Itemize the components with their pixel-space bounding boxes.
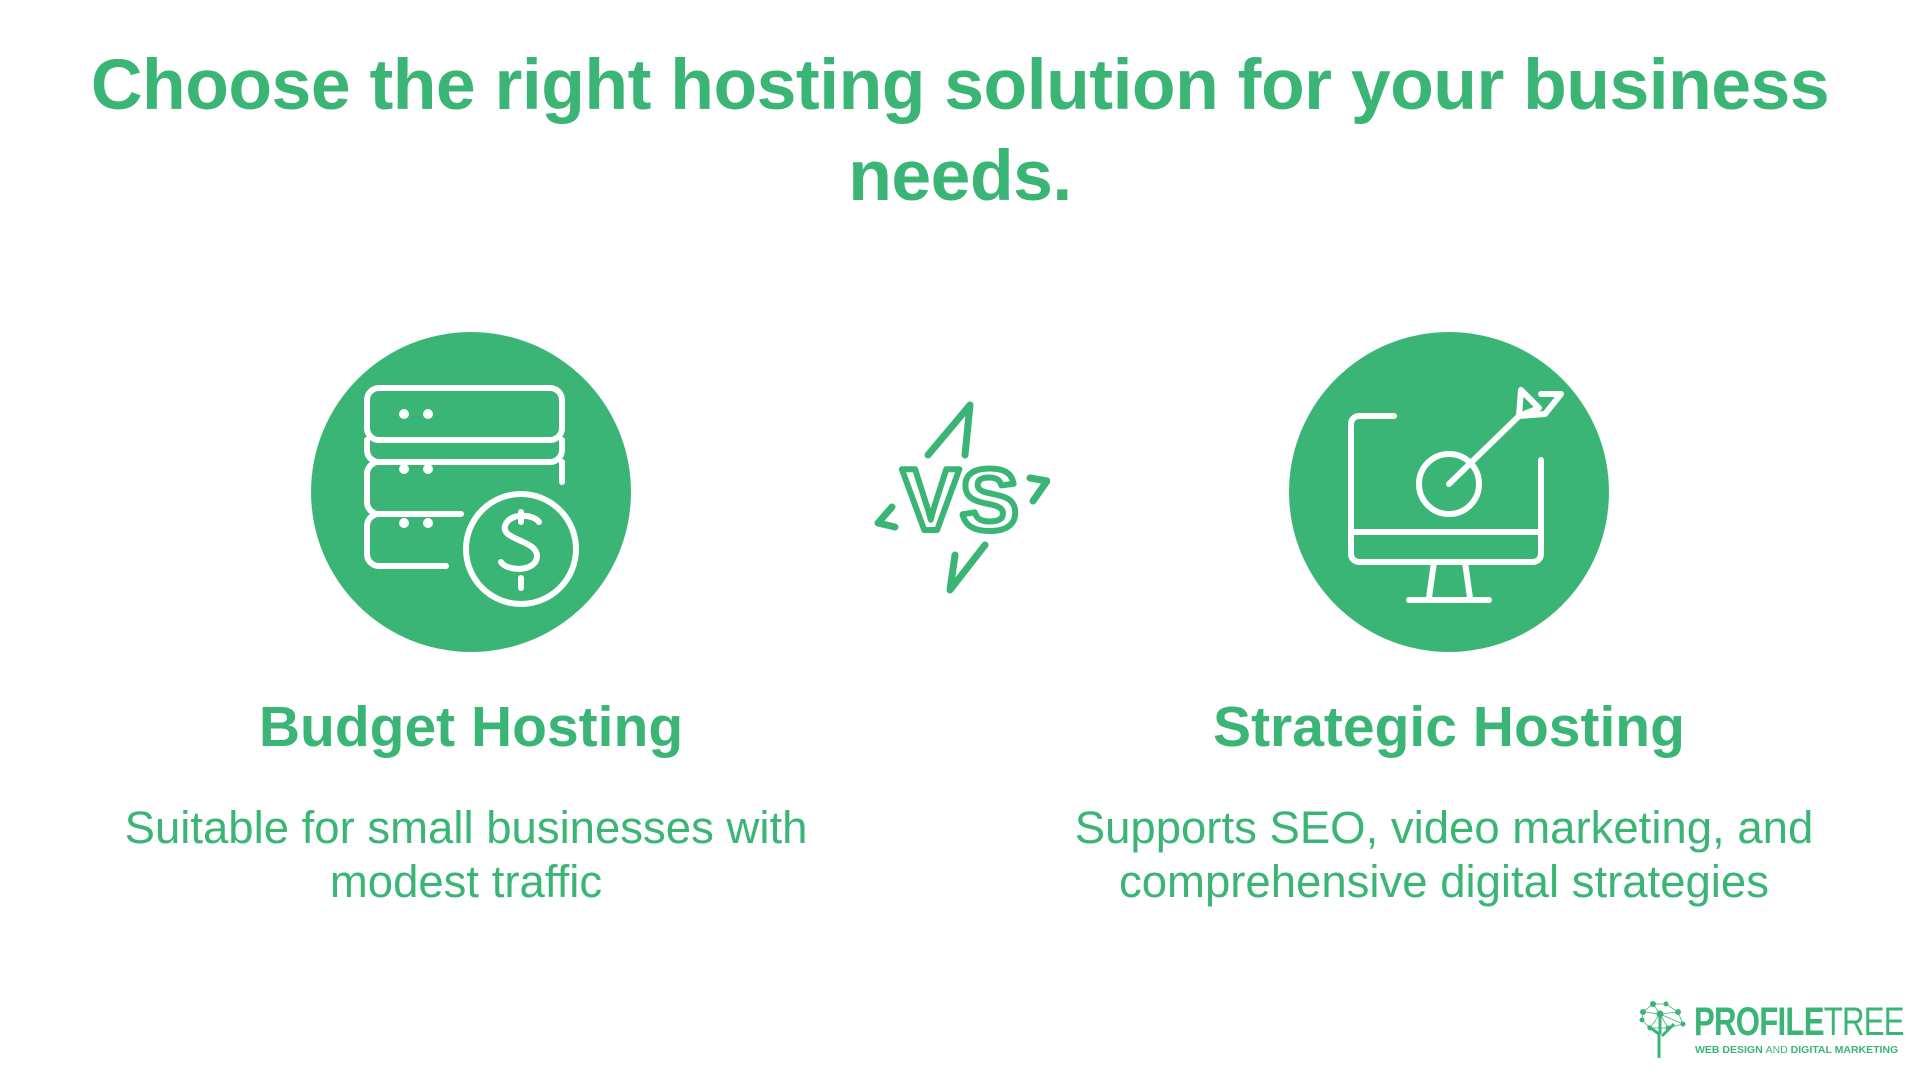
icon: VS: VS bbox=[901, 450, 1019, 549]
logo: ProfileTree: WEB DESIGN AND DIGITAL MARKETING bbox=[1695, 1044, 1898, 1056]
icon: monitor with target bbox=[1289, 332, 1609, 652]
heading: Budget Hosting bbox=[259, 695, 683, 759]
logo: ProfileTree bbox=[1640, 1000, 1904, 1058]
description: Suitable for small businesses with bbox=[125, 802, 807, 853]
description bbox=[125, 802, 807, 907]
title: Choose the right hosting solution for your business bbox=[91, 45, 1829, 125]
title: needs. bbox=[848, 136, 1072, 216]
logo: ProfileTree: PROFILETREE bbox=[1694, 1000, 1904, 1044]
panel: budget hosting bbox=[125, 332, 807, 907]
icon: server with dollar bbox=[311, 332, 631, 652]
description: modest traffic bbox=[330, 856, 602, 907]
title bbox=[91, 45, 1829, 216]
icon: VS bbox=[874, 402, 1050, 594]
panel: strategic hosting bbox=[1075, 332, 1813, 907]
description bbox=[1075, 802, 1813, 907]
description: comprehensive digital strategies bbox=[1119, 856, 1769, 907]
heading: Strategic Hosting bbox=[1213, 695, 1685, 759]
icon: tree bbox=[1640, 1001, 1686, 1058]
description: Supports SEO, video marketing, and bbox=[1075, 802, 1813, 853]
